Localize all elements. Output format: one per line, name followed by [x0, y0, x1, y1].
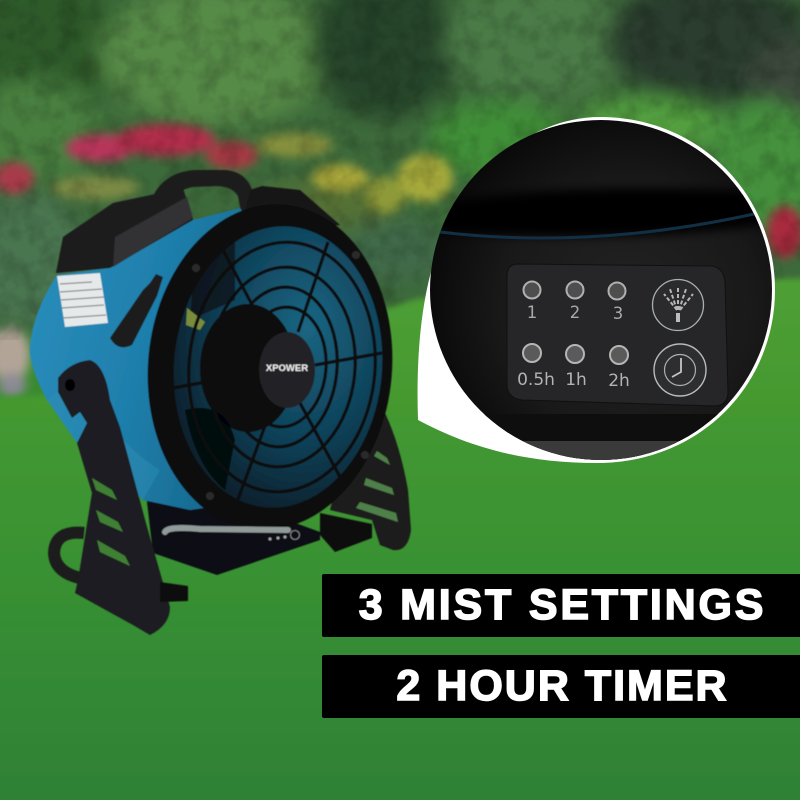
callout: zoomed control panel: [418, 117, 775, 463]
mist level indicators 1 2 3: [524, 282, 626, 300]
callout: zoomed control panel: 2: [570, 303, 580, 322]
callout: zoomed control panel: 1h: [565, 370, 587, 390]
hose nozzle: [110, 274, 163, 347]
timer indicators 0.5h 1h 2h: [523, 344, 628, 364]
hub with logo: [259, 332, 315, 408]
ring screws: [192, 251, 369, 500]
callout: zoomed control panel: 0.5h: [517, 370, 555, 390]
spec label: [57, 273, 108, 327]
grille: [173, 234, 386, 502]
carry handle: [153, 170, 254, 222]
callout: zoomed control panel: 1: [527, 303, 537, 322]
product: XPOWER misting fan: XPOWER: [266, 363, 308, 374]
label: 3 mist settings: [322, 574, 800, 637]
water tank lid: [56, 188, 193, 273]
water hose and base controls: [165, 528, 288, 532]
label: 3 mist settings: 3 MIST SETTINGS: [359, 581, 766, 629]
fan body: [30, 208, 300, 510]
icon: mist button: [652, 280, 704, 330]
callout: zoomed control panel: 3: [613, 304, 623, 323]
callout white teardrop frame: [418, 117, 775, 463]
front ring: [134, 194, 406, 540]
label: 2 hour timer: [322, 655, 800, 718]
front stand: [58, 360, 170, 635]
tube hoop: [54, 533, 84, 578]
base unit: [145, 485, 320, 575]
callout: zoomed control panel: 2h: [608, 371, 630, 391]
label: 2 hour timer: 2 HOUR TIMER: [396, 662, 729, 710]
control panel plate: [507, 264, 728, 406]
icon: timer clock button: [654, 344, 706, 396]
rear stand: [330, 413, 411, 550]
